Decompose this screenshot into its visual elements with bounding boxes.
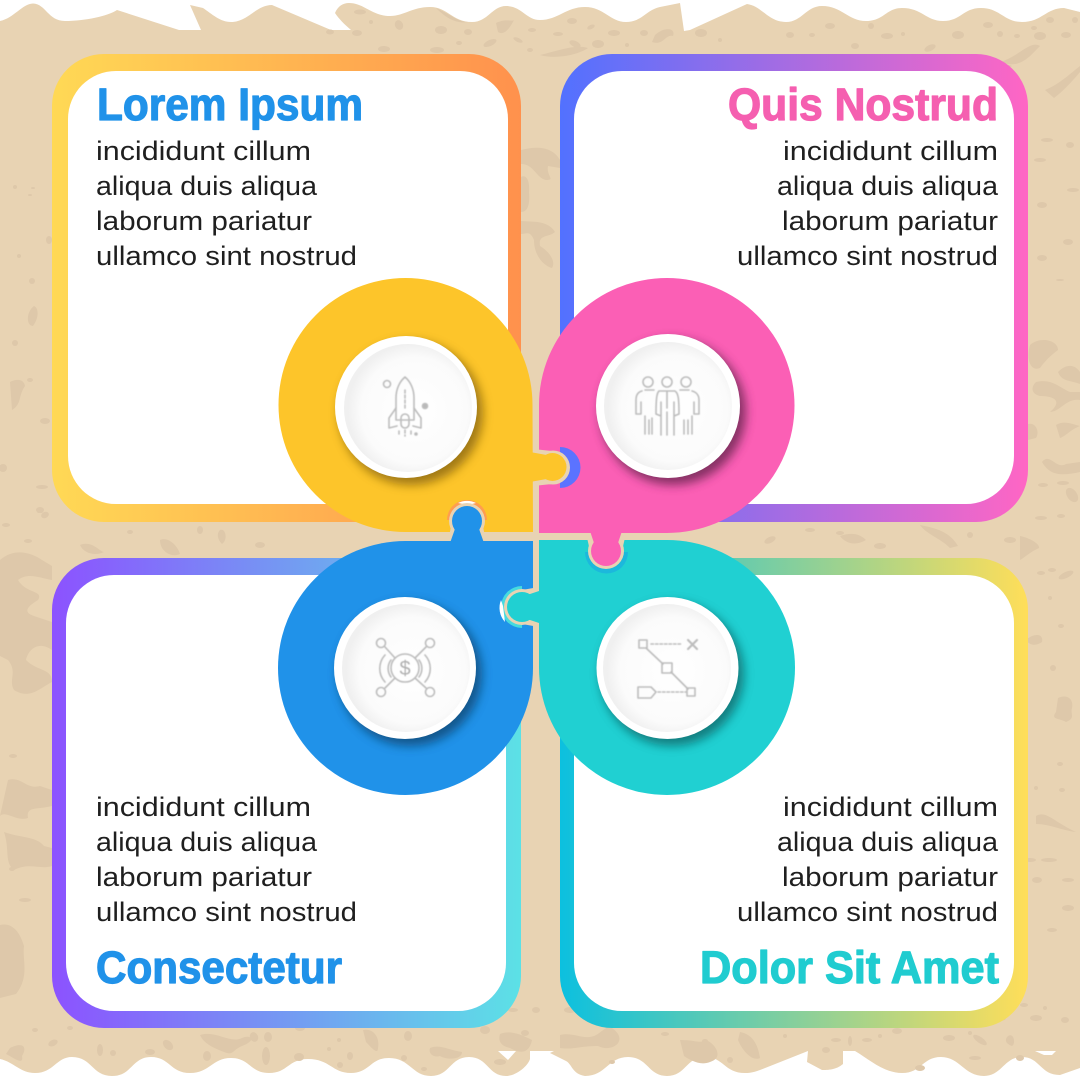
text block: Lorem Ipsum body: aliqua duis aliqua xyxy=(96,171,318,201)
text block: Quis Nostrud body xyxy=(737,136,999,271)
puzzle tab: yellow into pink xyxy=(530,447,580,488)
text block: Consectetur body: incididunt cillum xyxy=(96,792,311,822)
text block: Quis Nostrud body: laborum pariatur xyxy=(782,206,998,236)
text block: Quis Nostrud body: ullamco sint nostrud xyxy=(737,241,998,271)
icon: dollar network xyxy=(376,638,434,696)
text block: Consectetur body xyxy=(96,792,357,927)
heading: Quis Nostrud: Quis Nostrud xyxy=(728,79,998,130)
panel: Dolor Sit Amet xyxy=(560,558,1028,1028)
text block: Consectetur body: aliqua duis aliqua xyxy=(96,827,318,857)
panel: Quis Nostrud xyxy=(560,54,1028,522)
text block: Dolor Sit Amet body: incididunt cillum xyxy=(783,792,998,822)
text block: Lorem Ipsum body xyxy=(96,136,357,271)
text block: Lorem Ipsum body: incididunt cillum xyxy=(96,136,311,166)
icon: team of three people xyxy=(636,377,699,435)
text block: Consectetur body: laborum pariatur xyxy=(96,862,312,892)
heading: Consectetur: Consectetur xyxy=(96,942,342,993)
puzzle tab: pink into teal xyxy=(585,531,628,574)
text block: Dolor Sit Amet body: aliqua duis aliqua xyxy=(777,827,999,857)
heading: Dolor Sit Amet: Dolor Sit Amet xyxy=(700,942,999,993)
puzzle tab: blue into yellow xyxy=(447,500,487,543)
puzzle petal: blue with dollar network xyxy=(278,541,533,795)
heading: Lorem Ipsum: Lorem Ipsum xyxy=(97,79,363,130)
text block: Dolor Sit Amet body: ullamco sint nostrud xyxy=(737,897,998,927)
icon: dollar network: $ xyxy=(399,658,411,680)
icon: route path xyxy=(638,640,697,698)
panel: Lorem Ipsum xyxy=(52,54,521,522)
text block: Dolor Sit Amet body xyxy=(737,792,999,927)
text block: Lorem Ipsum body: laborum pariatur xyxy=(96,206,312,236)
text block: Dolor Sit Amet body: laborum pariatur xyxy=(782,862,998,892)
text block: Quis Nostrud body: aliqua duis aliqua xyxy=(777,171,999,201)
icon: rocket xyxy=(384,377,428,436)
panel: Consectetur xyxy=(52,558,521,1028)
text block: Lorem Ipsum body: ullamco sint nostrud xyxy=(96,241,357,271)
puzzle petal: yellow with rocket xyxy=(278,278,533,532)
text block: Quis Nostrud body: incididunt cillum xyxy=(783,136,998,166)
puzzle tab: teal into blue xyxy=(499,586,542,628)
puzzle petal: pink with team xyxy=(539,278,795,533)
text block: Consectetur body: ullamco sint nostrud xyxy=(96,897,357,927)
puzzle petal: teal with path xyxy=(539,540,795,795)
